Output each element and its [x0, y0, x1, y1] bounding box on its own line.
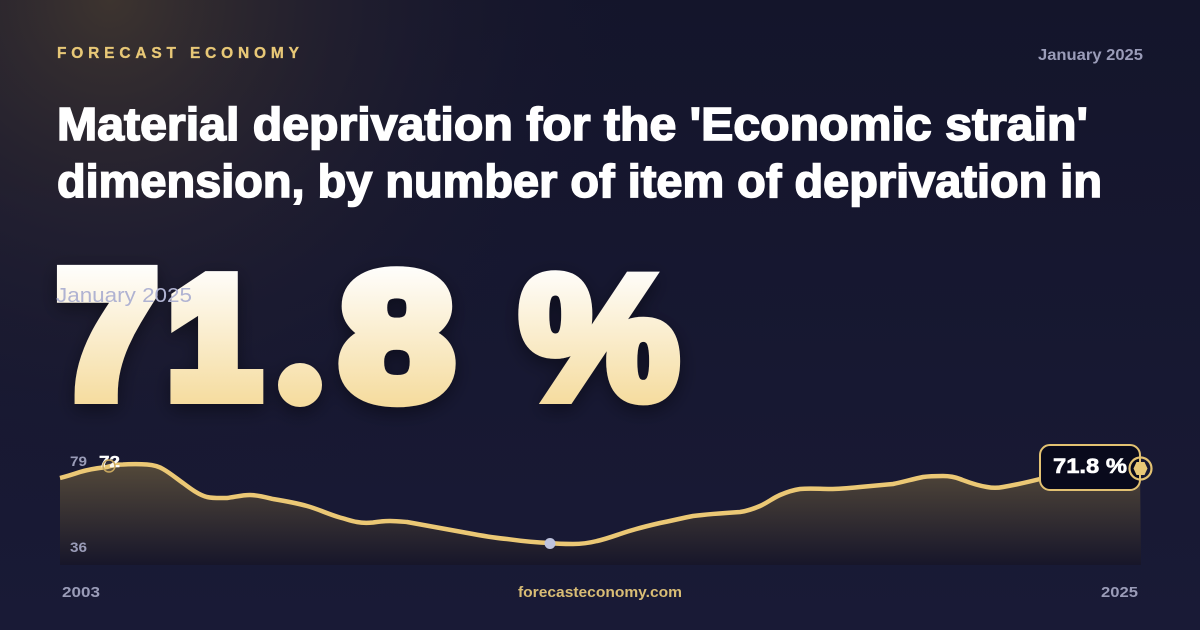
big value: % — [520, 241, 679, 436]
big value — [58, 237, 679, 436]
big value: . — [291, 285, 324, 419]
date label: January 2025 — [1038, 47, 1143, 64]
title — [57, 98, 1102, 207]
callout: 71.8 % — [1053, 455, 1127, 478]
low point marker — [544, 538, 556, 549]
big value: 1 — [169, 244, 259, 431]
title: Material deprivation for the 'Economic strain' — [57, 98, 1088, 150]
big value: 8 — [340, 238, 453, 436]
end year: 2025 — [1101, 585, 1138, 601]
overlapping date: January 2025 — [56, 285, 192, 307]
peak marker — [103, 460, 115, 472]
big value: 7 — [58, 237, 156, 433]
start year: 2003 — [62, 585, 100, 601]
callout — [1040, 445, 1140, 490]
axis min label: 36 — [70, 540, 88, 555]
brand label: FORECAST ECONOMY — [57, 45, 300, 62]
axis max label: 79 — [70, 454, 87, 469]
trend line — [60, 464, 1040, 544]
area chart — [60, 454, 1141, 565]
source site: forecasteconomy.com — [518, 585, 682, 601]
end point marker — [1130, 458, 1152, 480]
area fill — [60, 464, 1141, 565]
peak value label: 72 — [99, 454, 120, 471]
title: dimension, by number of item of deprivation in — [57, 155, 1102, 207]
